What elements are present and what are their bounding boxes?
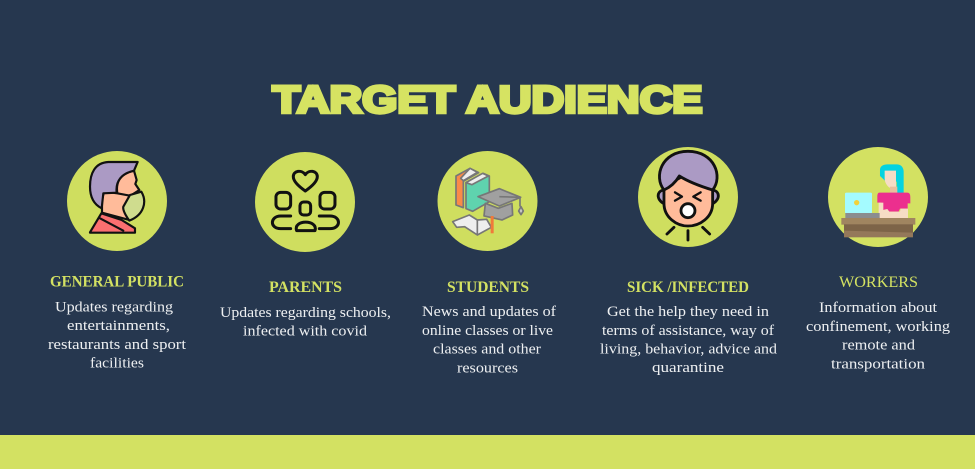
description: students: classes and other bbox=[433, 342, 541, 358]
description: general public bbox=[48, 300, 186, 372]
heading: students: STUDENTS bbox=[447, 279, 529, 296]
column: workers bbox=[806, 147, 950, 372]
description: general public: facilities bbox=[90, 356, 145, 372]
description: workers: transportation bbox=[831, 356, 925, 372]
description: workers: confinement, working bbox=[806, 319, 950, 335]
icon: worker at desk with laptop bbox=[828, 147, 928, 247]
column: general public bbox=[48, 151, 186, 372]
description: sick / infected bbox=[600, 304, 777, 376]
description: students: News and updates of bbox=[422, 304, 556, 320]
heading: general public: GENERAL PUBLIC bbox=[50, 274, 184, 290]
description: sick / infected: terms of assistance, way of bbox=[602, 323, 774, 339]
column: parents bbox=[220, 152, 391, 340]
description: workers: remote and bbox=[842, 338, 915, 354]
description: parents: infected with covid bbox=[243, 324, 367, 340]
description: sick / infected: quarantine bbox=[652, 360, 724, 376]
description: sick / infected: Get the help they need in bbox=[607, 304, 769, 320]
column: students bbox=[422, 151, 556, 376]
description: workers bbox=[806, 300, 950, 372]
column: sick / infected bbox=[600, 147, 777, 376]
description: general public: Updates regarding bbox=[55, 300, 173, 316]
title: TARGET AUDIENCE bbox=[272, 80, 702, 122]
icon: family with heart bbox=[255, 152, 355, 252]
heading: sick / infected: SICK /INFECTED bbox=[627, 279, 749, 296]
description: students bbox=[422, 304, 556, 376]
description: students: resources bbox=[457, 360, 519, 376]
description: parents: Updates regarding schools, bbox=[220, 305, 391, 321]
heading: parents: PARENTS bbox=[269, 279, 342, 296]
icon: books and graduation cap bbox=[438, 151, 538, 251]
description: general public: restaurants and sport bbox=[48, 337, 186, 353]
description: general public: entertainments, bbox=[67, 318, 170, 334]
bottom green band bbox=[0, 435, 975, 469]
description: workers: Information about bbox=[819, 300, 937, 316]
description: sick / infected: living, behavior, advice and bbox=[600, 342, 777, 358]
description: students: online classes or live bbox=[422, 323, 553, 339]
icon: person with mask bbox=[67, 151, 167, 251]
description: parents bbox=[220, 305, 391, 340]
icon: sick face coughing bbox=[638, 147, 738, 247]
heading: workers: WORKERS bbox=[839, 274, 918, 291]
